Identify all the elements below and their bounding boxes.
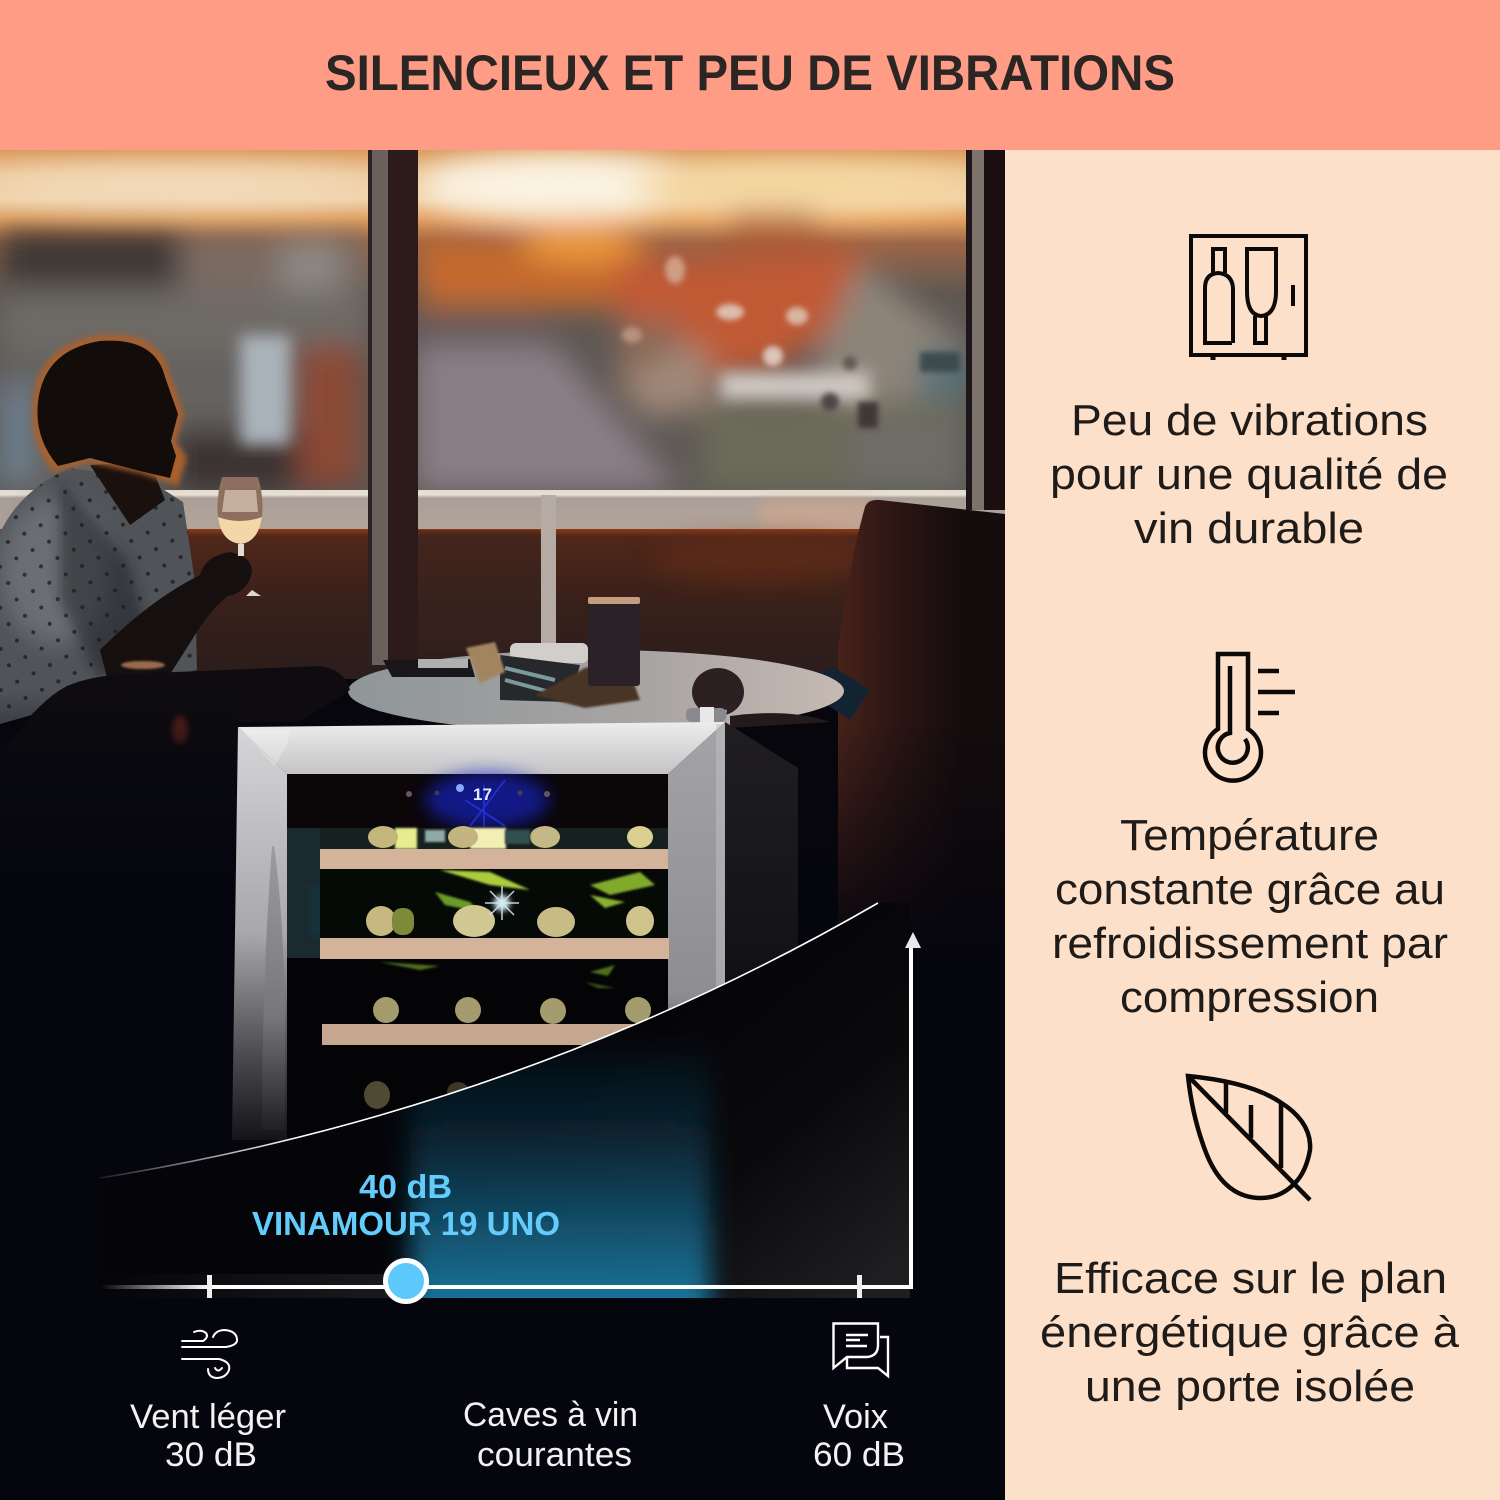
label: common wine cellars — [463, 1396, 638, 1474]
brown object — [466, 642, 505, 683]
bottles row 3 — [373, 962, 651, 1024]
text: low vibrations: vin durable — [1134, 504, 1364, 553]
text: energy efficient: Efficace sur le plan — [1054, 1254, 1447, 1303]
header band — [0, 0, 1500, 150]
arm and hand — [100, 552, 252, 676]
title: SILENCIEUX ET PEU DE VIBRATIONS — [325, 45, 1175, 101]
blurred sunset city view — [0, 150, 1005, 495]
dark floor fade — [0, 690, 238, 890]
tick 30 dB — [207, 1275, 212, 1298]
window frames — [368, 150, 372, 665]
table — [348, 597, 844, 732]
noise curve — [100, 903, 878, 1178]
paper — [510, 643, 588, 663]
text: constant temperature: compression — [1120, 973, 1379, 1022]
ball shadow — [692, 668, 744, 716]
label: voice 60 dB: 60 dB — [813, 1436, 905, 1474]
wine cooler — [232, 707, 798, 1140]
bottles row 4 — [364, 1081, 390, 1109]
magazine — [500, 655, 580, 702]
hair — [37, 341, 178, 478]
display glow — [406, 772, 550, 828]
text: constant temperature: Température — [1120, 811, 1379, 860]
text: low vibrations: pour une qualité de — [1050, 450, 1448, 499]
bottles row 2 — [320, 869, 668, 939]
panel: photo with wine cooler — [0, 150, 1005, 1500]
label: voice 60 dB — [813, 1398, 905, 1474]
label: common wine cellars: courantes — [477, 1436, 632, 1474]
label: voice 60 dB: Voix — [823, 1398, 888, 1436]
hair rim glow — [32, 334, 187, 486]
display glow: 17 — [473, 785, 492, 804]
label: 40 dB product: VINAMOUR 19 UNO — [252, 1205, 560, 1242]
cooler side — [725, 722, 798, 982]
window rail and lower wall — [0, 490, 1005, 530]
text: constant temperature: constante grâce au — [1055, 865, 1445, 914]
text: constant temperature — [1052, 811, 1448, 1022]
label: 40 dB product — [252, 1168, 560, 1242]
cooler window — [287, 774, 668, 1140]
axis arrow — [905, 932, 921, 948]
armchair — [838, 500, 1005, 924]
icon: speech bubbles — [834, 1324, 888, 1376]
box on table — [588, 600, 640, 686]
icon: thermometer — [1205, 654, 1295, 781]
label: wind 30 dB: 30 dB — [165, 1436, 257, 1474]
icon: leaf — [1188, 1076, 1310, 1200]
marker 40 dB — [386, 1260, 426, 1302]
handle — [262, 846, 285, 1106]
shelf 1 — [320, 849, 668, 869]
blue glow — [410, 1040, 710, 1330]
text: energy efficient — [1040, 1254, 1460, 1411]
woman silhouette with wine glass — [0, 332, 350, 747]
shirt — [0, 468, 197, 724]
label: 40 dB product: 40 dB — [359, 1168, 452, 1205]
shelf 2 — [320, 938, 669, 959]
text: energy efficient: énergétique grâce à — [1040, 1308, 1460, 1357]
knob — [686, 708, 726, 722]
decibel axis — [100, 932, 921, 1302]
sofa / lap — [32, 666, 350, 715]
icon: wind — [182, 1330, 237, 1378]
book — [383, 659, 475, 677]
text: low vibrations — [1050, 396, 1448, 553]
dark area under the noise curve — [448, 903, 910, 1298]
wine glass — [218, 477, 262, 596]
panel: features — [1005, 150, 1500, 1500]
label: common wine cellars: Caves à vin — [463, 1396, 638, 1434]
neck — [90, 462, 165, 525]
text: constant temperature: refroidissement par — [1052, 919, 1448, 968]
tick 60 dB — [857, 1275, 862, 1298]
icon: wine cooler — [1191, 236, 1306, 360]
glass on sofa table — [121, 661, 165, 669]
bottles row 1 — [320, 826, 668, 850]
label: wind 30 dB — [130, 1398, 286, 1474]
shelf 3 — [322, 1024, 668, 1045]
text: low vibrations: Peu de vibrations — [1071, 396, 1428, 445]
cooler frame — [238, 722, 725, 774]
text: energy efficient: une porte isolée — [1085, 1362, 1415, 1411]
label: wind 30 dB: Vent léger — [130, 1398, 286, 1436]
